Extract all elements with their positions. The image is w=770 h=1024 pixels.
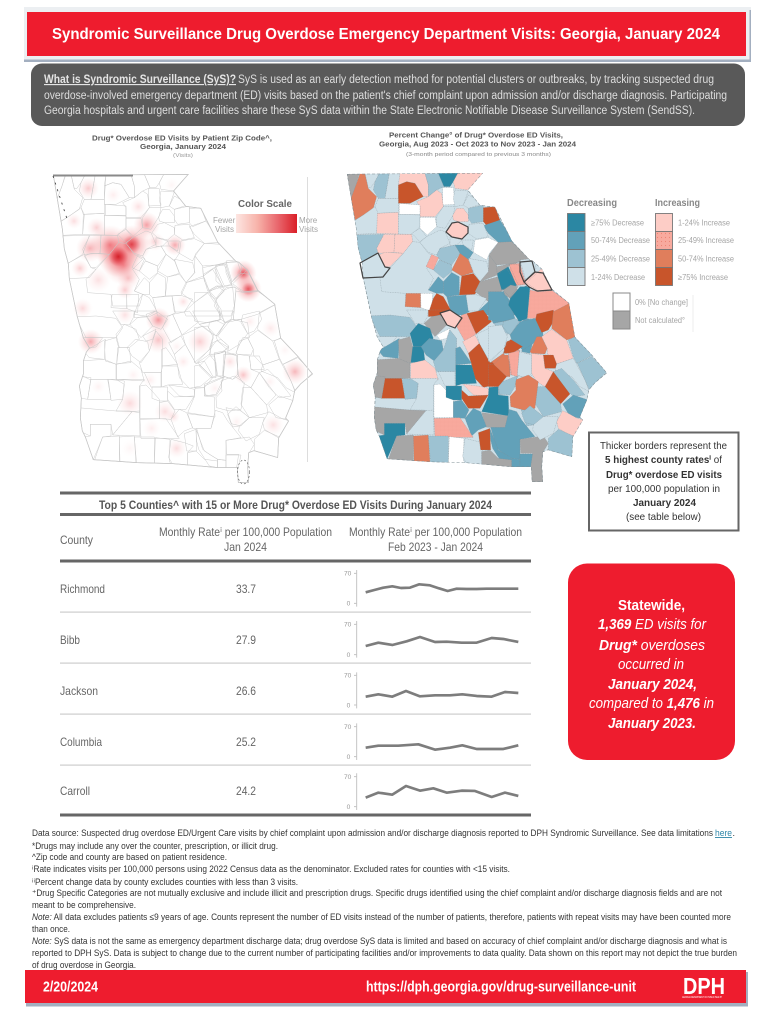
table column headers: Monthly Rateⁱ per 100,000 Population [159, 525, 332, 539]
legend: decreasing: 25-49% Decrease [591, 254, 650, 264]
left map heading [92, 134, 272, 159]
table rows: 24.2 [236, 784, 256, 798]
color scale legend: Color Scale [238, 199, 292, 210]
legend: increasing: 1-24% Increase [678, 218, 731, 228]
legend: increasing: 25-49% Increase [678, 236, 735, 245]
sparklines: 0 [347, 754, 351, 761]
callout: thicker borders: (see table below) [626, 511, 701, 523]
right map heading: Georgia, Aug 2023 - Oct 2023 to Nov 2023 - Jan 2024 [379, 142, 576, 148]
legend: no change and not calculated: 0% [No change] [635, 298, 688, 307]
table: top 5 counties [60, 492, 531, 816]
sparklines: 70 [344, 673, 352, 680]
footnotes: Note: SyS data is not the same as emergency department discharge data; drug overdose SyS data is limited and based on accuracy of chief complaint and/or discharge diagnosis and what is [32, 936, 727, 946]
title banner [24, 7, 751, 62]
callout: thicker borders: Drug* overdose ED visits [606, 469, 722, 481]
footnotes: ⁱRate indicates visits per 100,000 persons using 2022 Census data as the denominator. Excluded rates for counties with <15 visits. [32, 864, 510, 874]
legend: no change and not calculated: Not calculated° [635, 316, 685, 325]
color scale legend [213, 199, 318, 234]
icon: DPH logo: GEORGIA DEPARTMENT OF PUBLIC HEALTH [682, 996, 722, 999]
footnotes: *Drugs may include any over the counter, prescription, or illicit drug. [32, 841, 278, 851]
callout: thicker borders: 5 highest county ratesⁱ of [605, 453, 722, 466]
footer banner: https://dph.georgia.gov/drug-surveillance-unit [366, 978, 636, 996]
map: percent change by county [345, 172, 607, 485]
sparklines [344, 570, 518, 811]
footnotes: meant to be comprehensive. [32, 900, 136, 910]
table rows: Carroll [60, 784, 90, 798]
map: visits heat map by zip code [51, 173, 318, 486]
sparklines: 0 [347, 804, 351, 811]
sparklines: 70 [344, 724, 352, 731]
panel: what is syndromic surveillance [31, 64, 745, 126]
legend: increasing: 50-74% Increase [678, 254, 735, 264]
footer banner: 2/20/2024 [43, 978, 99, 996]
legend: decreasing: Decreasing [567, 197, 617, 209]
callout: statewide total: Statewide, [618, 598, 685, 614]
table rows: Richmond [60, 582, 105, 596]
legend: increasing: Increasing [655, 197, 700, 209]
footnotes: Data source: Suspected drug overdose ED/Urgent Care visits by chief complaint upon admission and/or discharge diagnosis reported to DPH Syndromic Surveillance. See data limitations [32, 828, 713, 838]
table rows: Bibb [60, 633, 80, 647]
table heading [60, 492, 531, 516]
footer banner [25, 970, 748, 1006]
sparklines: 0 [347, 702, 351, 709]
callout: thicker borders [589, 432, 738, 530]
table rows: 25.2 [236, 735, 256, 749]
left map heading: Georgia, January 2024 [140, 144, 226, 151]
legend: no change and not calculated [613, 293, 694, 332]
legend: decreasing: 1-24% Decrease [591, 273, 645, 282]
footnotes: ^Zip code and county are based on patient residence. [32, 852, 227, 862]
table rows: Columbia [60, 735, 102, 749]
table rows: Jackson [60, 684, 98, 698]
left map heading: Drug* Overdose ED Visits by Patient Zip Code^, [92, 134, 272, 142]
table heading: Top 5 Counties^ with 15 or More Drug* Overdose ED Visits During January 2024 [99, 500, 493, 512]
right map heading: Percent Change° of Drug* Overdose ED Visits, [389, 132, 563, 140]
table column headers [60, 525, 531, 562]
right map heading: (3-month period compared to previous 3 months) [406, 152, 551, 158]
callout: statewide total [568, 564, 735, 760]
color scale legend: Fewer [213, 216, 236, 225]
footnotes: . [732, 828, 735, 838]
callout: statewide total: January 2024, [608, 677, 697, 693]
table column headers: County [60, 533, 93, 547]
color scale legend: More [299, 216, 318, 225]
color scale legend: Visits [215, 225, 234, 234]
table column headers: Monthly Rateⁱ per 100,000 Population [349, 525, 522, 539]
table column headers: Feb 2023 - Jan 2024 [388, 540, 483, 554]
table rows: 27.9 [236, 633, 256, 647]
sparklines: 0 [347, 652, 351, 659]
panel: what is syndromic surveillance: Georgia hospitals and urgent care facilities share these SyS data within the State Electronic Notifiable Disease Surveillance System (SendSS). [44, 105, 695, 117]
table rows [60, 582, 531, 816]
footnotes: ⁱⁱPercent change data by county excludes counties with less than 3 visits. [32, 877, 298, 887]
sparklines: 0 [347, 601, 351, 608]
callout: statewide total: 1,369 ED visits for [598, 617, 707, 633]
legend: decreasing: 50-74% Decrease [591, 236, 650, 245]
callout: thicker borders: January 2024 [633, 497, 696, 509]
callout: thicker borders: per 100,000 population in [608, 483, 720, 495]
sparklines: 70 [344, 622, 352, 629]
callout: statewide total: January 2023. [608, 716, 696, 732]
panel: what is syndromic surveillance: What is Syndromic Surveillance (SyS)? [44, 74, 236, 86]
table column headers: Jan 2024 [224, 540, 267, 554]
table rows: 33.7 [236, 582, 256, 596]
callout: statewide total: compared to 1,476 in [589, 696, 714, 712]
legend: increasing: ≥75% Increase [678, 273, 729, 282]
callout: statewide total: occurred in [618, 657, 684, 673]
left map heading: (Visits) [173, 153, 193, 159]
right map heading [379, 132, 576, 158]
footnotes: here [715, 828, 732, 838]
footnotes [32, 828, 737, 970]
legend: decreasing [567, 197, 650, 286]
table rows: 26.6 [236, 684, 256, 698]
legend: increasing [655, 197, 735, 286]
legend: decreasing: ≥75% Decrease [591, 218, 645, 228]
title banner: Syndromic Surveillance Drug Overdose Emergency Department Visits: Georgia, January 2024 [52, 26, 720, 43]
color scale legend: Visits [299, 225, 318, 234]
footnotes: Note: All data excludes patients ≤9 years of age. Counts represent the number of ED visits instead of the number of patients, therefore, patients with repeat visits may have been counted more [32, 912, 731, 922]
callout: thicker borders: Thicker borders represent the [600, 440, 727, 452]
thick border counties [360, 222, 552, 328]
footnotes: ⁺Drug Specific Categories are not mutually exclusive and include illicit and prescription drugs. Specific drugs identified using the chief complaint and/or discharge diagnosis fields and are not [32, 888, 722, 898]
panel: what is syndromic surveillance: SyS is used as an early detection method for potential clusters or outbreaks, by tracking suspected drug [238, 74, 714, 86]
sparklines: 70 [344, 774, 352, 781]
footnotes: than once. [32, 924, 70, 934]
callout: statewide total: Drug* overdoses [599, 638, 705, 654]
sparklines: 70 [344, 571, 352, 578]
icon: DPH logo: DPH [683, 973, 725, 999]
footnotes: of drug overdose in Georgia. [32, 960, 136, 970]
